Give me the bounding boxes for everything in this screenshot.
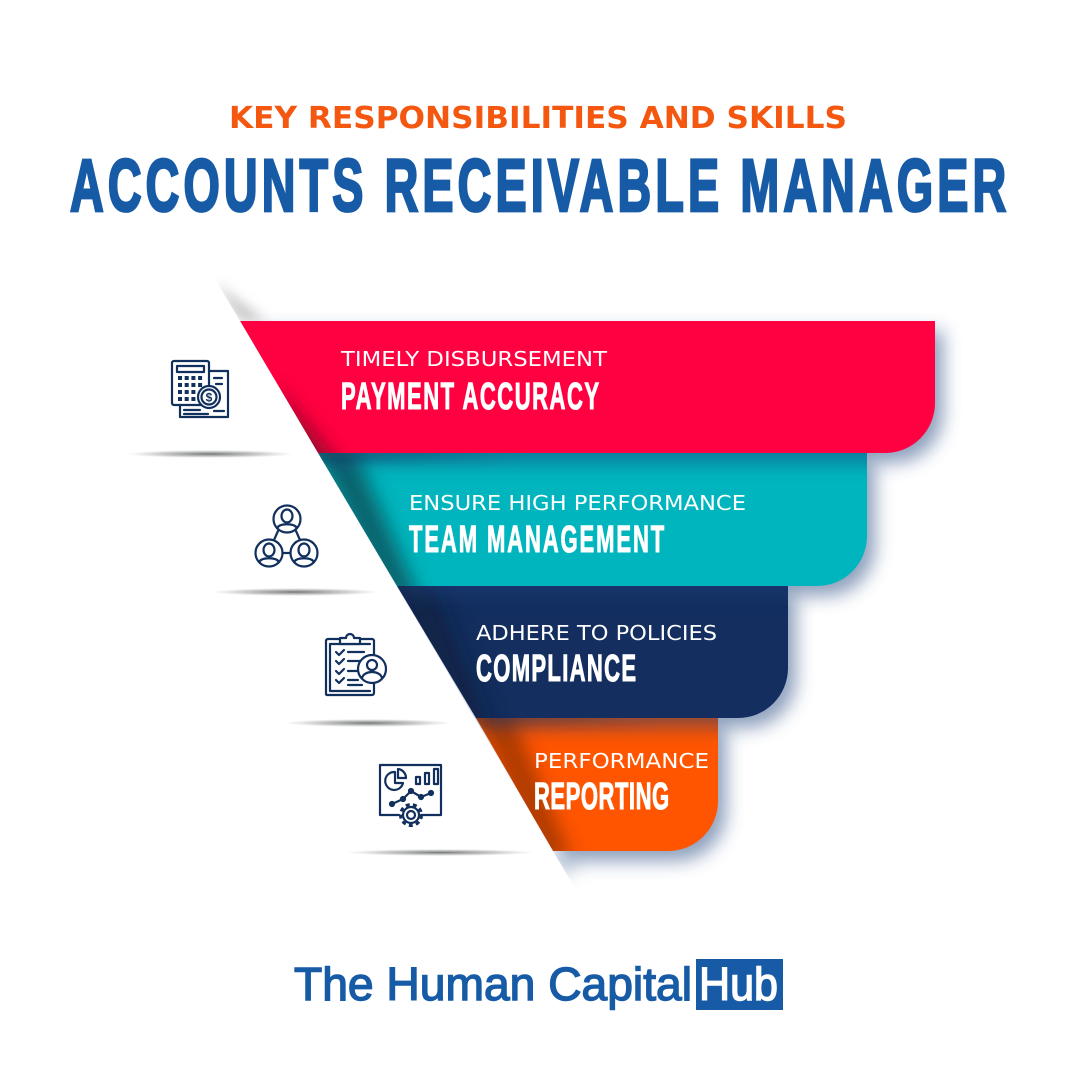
text: performance reporting	[534, 749, 709, 818]
text: performance reporting: PERFORMANCE	[534, 749, 709, 773]
text: ensure high performance team management: ENSURE HIGH PERFORMANCE	[409, 491, 746, 515]
band: payment accuracy	[240, 321, 943, 470]
icon: analytics dashboard with gear	[380, 765, 441, 826]
logo wordmark: The Human Capital	[294, 958, 692, 1010]
subtitle heading: KEY RESPONSIBILITIES AND SKILLS	[229, 101, 847, 136]
text: ensure high performance team management: TEAM MANAGEMENT	[409, 518, 664, 561]
shelf shadow 3	[284, 719, 452, 727]
band: reporting	[470, 700, 726, 875]
icon: team network	[256, 506, 318, 566]
icon: calculator and invoice	[172, 361, 228, 417]
icon: clipboard checklist with person	[326, 634, 386, 695]
band: team management	[310, 440, 875, 600]
text: adhere to policies compliance: ADHERE TO POLICIES	[476, 621, 717, 645]
shelf shadow 1	[126, 450, 294, 458]
fold shadow top	[214, 282, 266, 321]
shelf shadow 2	[211, 588, 379, 596]
text: performance reporting: REPORTING	[534, 775, 669, 818]
funnel chart	[220, 284, 956, 881]
white left fold panel	[0, 240, 578, 893]
logo	[294, 958, 783, 1010]
text: timely disbursement payment accuracy: PAYMENT ACCURACY	[341, 375, 599, 418]
text: adhere to policies compliance: COMPLIANCE	[476, 647, 636, 690]
icon: calculator and invoice: $	[206, 390, 213, 404]
text: timely disbursement payment accuracy	[340, 347, 608, 418]
logo hub box: Hub	[699, 958, 778, 1010]
text: timely disbursement payment accuracy: TIMELY DISBURSEMENT	[340, 347, 608, 371]
text: adhere to policies compliance	[476, 621, 717, 690]
band: compliance	[390, 570, 796, 730]
main title: ACCOUNTS RECEIVABLE MANAGER	[70, 145, 1006, 228]
shelf shadow 4	[346, 849, 534, 856]
text: ensure high performance team management	[409, 491, 746, 561]
